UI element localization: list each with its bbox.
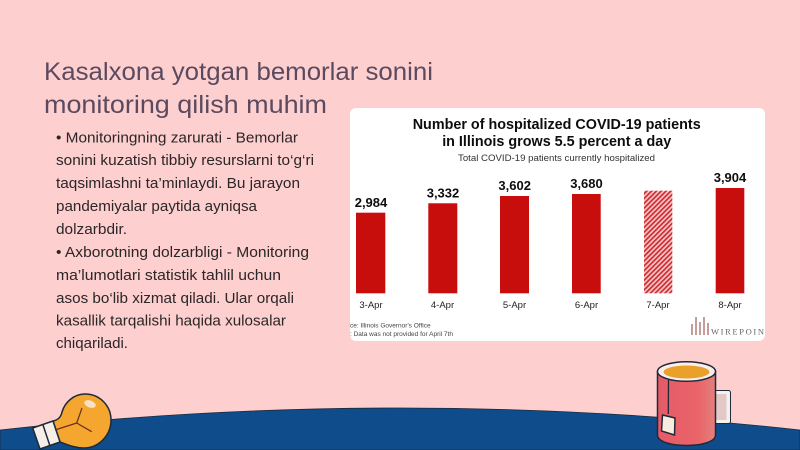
bar values: 3,602 <box>498 178 531 193</box>
bars <box>356 188 744 293</box>
bulb glass <box>53 394 111 448</box>
bulb base <box>33 421 60 449</box>
date labels <box>359 300 742 311</box>
title: monitoring qilish muhim <box>44 91 327 119</box>
source note <box>350 322 453 338</box>
icon: mug with tea bag <box>658 362 730 446</box>
bar values: 3,904 <box>714 170 747 185</box>
date labels: 7-Apr <box>646 300 670 311</box>
body text: kasallik tarqalishi haqida xulosalar <box>56 314 286 330</box>
date labels: 3-Apr <box>359 300 383 311</box>
blue wave footer <box>0 408 800 450</box>
date labels: 8-Apr <box>718 300 742 311</box>
mug body <box>658 372 716 446</box>
bar values: 2,984 <box>355 195 388 210</box>
date labels: 6-Apr <box>575 300 598 311</box>
source note: : Data was not provided for April 7th <box>350 331 453 338</box>
body text: chiqariladi. <box>56 336 128 352</box>
tea bag tag <box>662 415 675 435</box>
mug handle <box>713 390 730 424</box>
chart title <box>413 117 701 150</box>
date labels: 5-Apr <box>503 300 526 311</box>
bar values: 3,680 <box>570 176 603 191</box>
tea bag string <box>667 380 670 414</box>
chart title: in Illinois grows 5.5 percent a day <box>442 134 671 150</box>
title <box>44 58 433 119</box>
chart contents <box>350 117 764 338</box>
logo: Wirepoints: WIREPOIN <box>711 326 764 336</box>
body text: sonini kuzatish tibbiy resurslarni to‘g‘ri <box>56 153 314 169</box>
bar values <box>355 170 747 210</box>
body text: asos bo‘lib xizmat qiladi. Ular orqali <box>56 291 294 307</box>
body text: dolzarbdir. <box>56 222 127 238</box>
body text <box>56 130 314 352</box>
source note: ce: Illinois Governor's Office <box>350 322 431 330</box>
bar values: 3,332 <box>427 186 459 200</box>
logo: Wirepoints <box>692 317 764 336</box>
title: Kasalxona yotgan bemorlar sonini <box>44 58 433 86</box>
body text: taqsimlashni ta’minlaydi. Bu jarayon <box>56 176 300 192</box>
bulb filament <box>55 408 92 432</box>
date labels: 4-Apr <box>431 300 454 311</box>
panel: hospitalization chart <box>350 108 765 341</box>
chart title: Number of hospitalized COVID-19 patients <box>413 117 701 133</box>
bulb highlight <box>83 399 97 409</box>
mug rim <box>658 362 716 381</box>
body text: • Axborotning dolzarbligi - Monitoring <box>56 245 309 261</box>
body text: • Monitoringning zarurati - Bemorlar <box>56 130 298 146</box>
chart subtitle: Total COVID-19 patients currently hospitalized <box>458 153 655 164</box>
body text: ma’lumotlari statistik tahlil uchun <box>56 268 281 284</box>
chart card <box>350 108 765 341</box>
body text: pandemiyalar paytida ayniqsa <box>56 199 258 215</box>
icon: light bulb <box>33 394 111 449</box>
